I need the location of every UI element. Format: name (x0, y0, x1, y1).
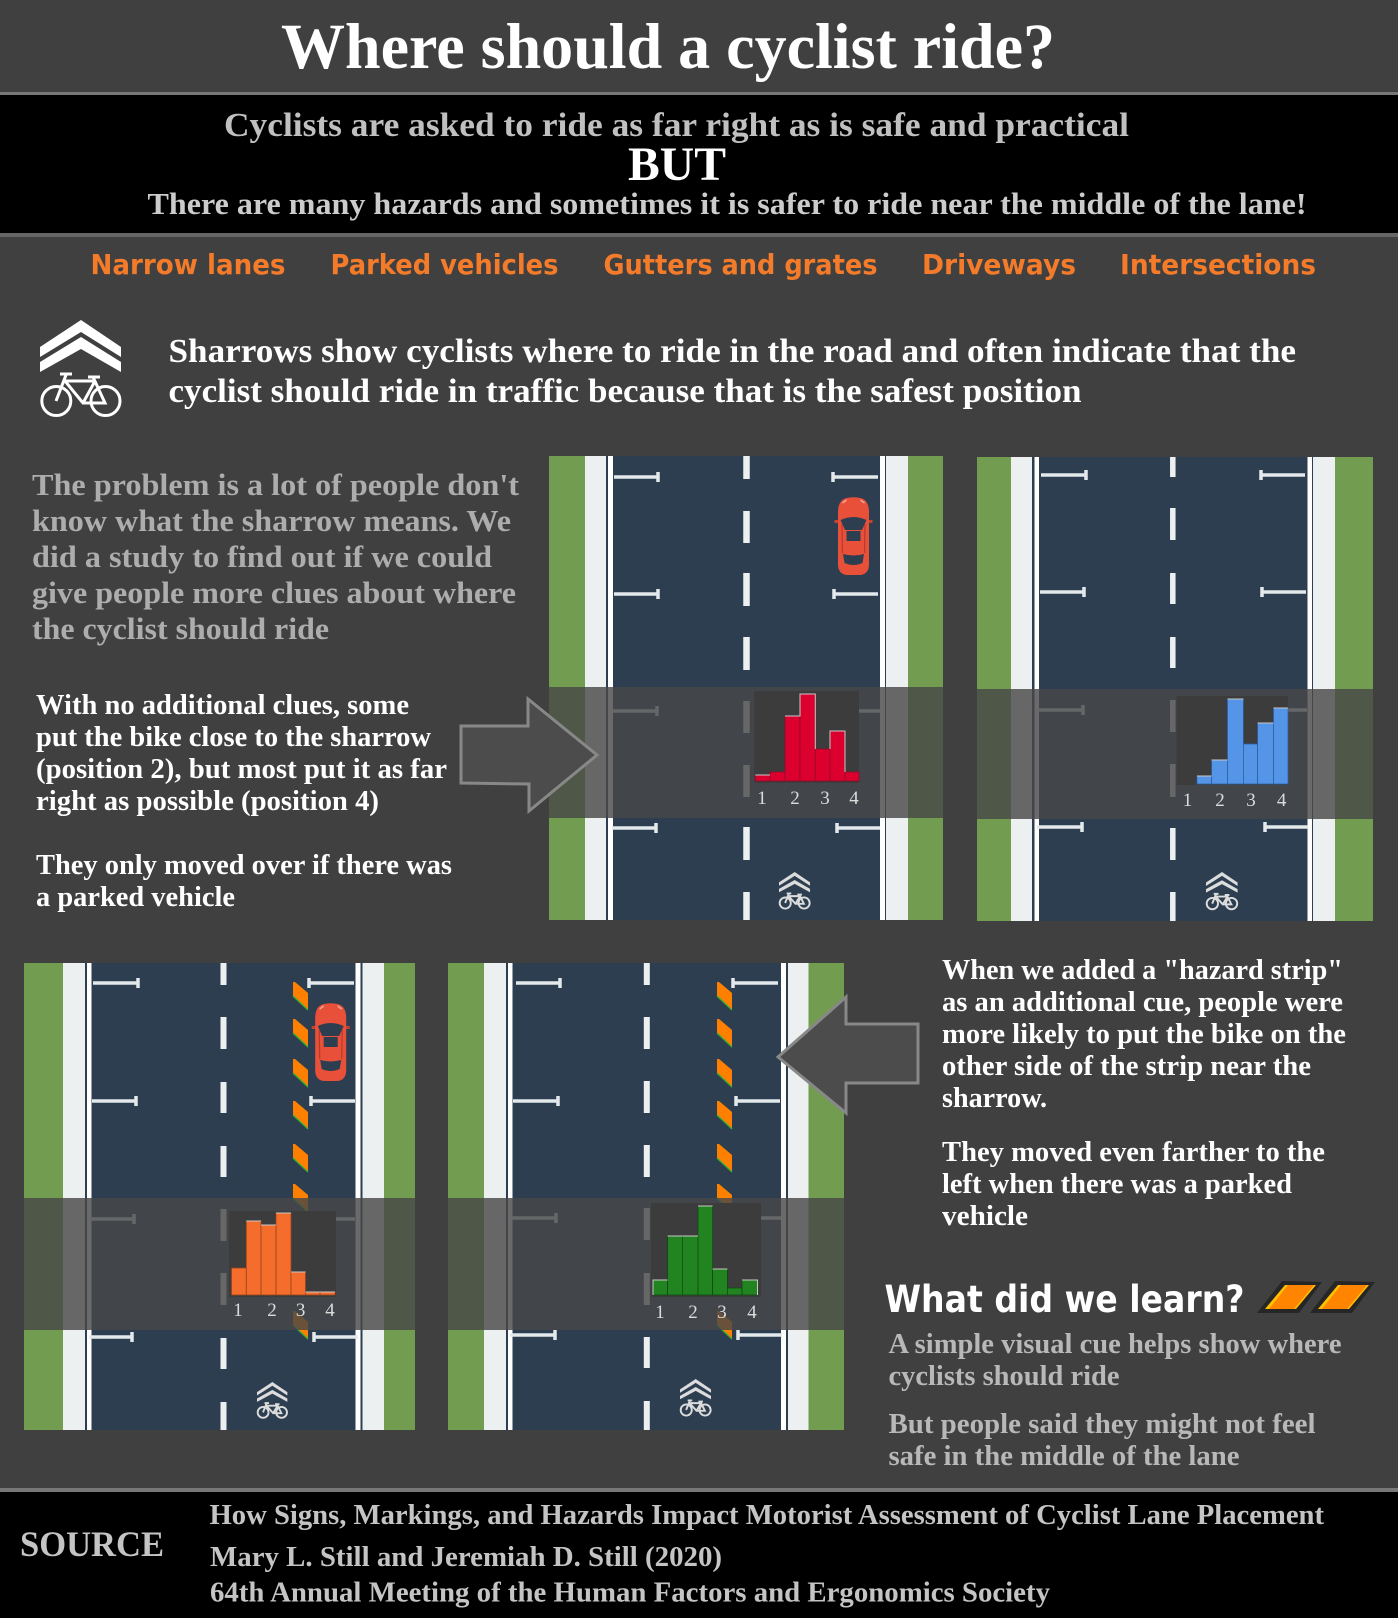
no-cue findings text (36, 690, 452, 913)
no-cue findings text: put the bike close to the sharrow (36, 722, 432, 753)
sharrow explanation (168, 333, 1296, 410)
hazard list: Parked vehicles (330, 248, 558, 281)
problem text: did a study to find out if we could (32, 539, 492, 574)
no-cue findings text: right as possible (position 4) (36, 786, 379, 817)
citation: Mary L. Still and Jeremiah D. Still (2020) (210, 1541, 722, 1573)
no-cue findings text: a parked vehicle (36, 882, 235, 913)
icon: sharrow (40, 320, 121, 416)
overlay band (448, 1198, 844, 1330)
source label: SOURCE (20, 1524, 164, 1564)
bar chart: no cue, no car: 4 (1277, 790, 1287, 811)
sharrow explanation: cyclist should ride in traffic because that is the safest position (168, 373, 1082, 410)
hazard strip (717, 982, 732, 1339)
hazard list: Gutters and grates (604, 248, 878, 281)
bar chart: no cue, parked car: 3 (820, 788, 830, 809)
bar chart: hazard strip, no car: 2 (688, 1302, 698, 1323)
hazard strip findings text: left when there was a parked (942, 1169, 1292, 1200)
overlay band (549, 687, 943, 818)
conclusions text: But people said they might not feel (888, 1408, 1316, 1440)
heading: what did we learn: What did we learn? (884, 1278, 1244, 1321)
no-cue findings text: With no additional clues, some (36, 690, 409, 721)
hazard strip findings text: They moved even farther to the (942, 1137, 1325, 1168)
overlay band (977, 689, 1373, 819)
bar chart: no cue, no car: 2 (1215, 790, 1225, 811)
problem text: the cyclist should ride (32, 611, 329, 646)
bar chart: no cue, no car: 1 (1183, 790, 1192, 811)
problem text: The problem is a lot of people don't (32, 467, 520, 502)
intro line two: There are many hazards and sometimes it is safer to ride near the middle of the lane! (148, 186, 1306, 221)
problem text: give people more clues about where (32, 575, 516, 610)
hazard strip (293, 982, 308, 1339)
icon: hazard strip swatches (1257, 1281, 1375, 1313)
icon: road sharrow (1206, 872, 1238, 909)
panel: intro banner (0, 92, 1398, 237)
bar chart: hazard strip, no car: 4 (747, 1302, 757, 1323)
hazard list: Driveways (922, 248, 1076, 281)
bar chart: hazard strip, parked car: 3 (296, 1300, 305, 1321)
icon: parked car (834, 497, 872, 575)
bar chart: hazard strip, parked car (229, 1211, 336, 1321)
but: BUT (628, 138, 726, 191)
bar chart: no cue, parked car: 4 (849, 788, 859, 809)
panel: road scene, hazard strip, no car (448, 963, 844, 1430)
bar chart: hazard strip, no car: 1 (655, 1302, 665, 1323)
bar chart: no cue, no car (1177, 696, 1288, 811)
citation: How Signs, Markings, and Hazards Impact Motorist Assessment of Cyclist Lane Placement (210, 1499, 1324, 1531)
panel: road scene, no car, no hazard strip (977, 457, 1373, 921)
hazard strip findings text: as an additional cue, people were (942, 987, 1343, 1018)
overlay band (24, 1198, 415, 1330)
title: Where should a cyclist ride? (281, 11, 1055, 83)
hazard list (90, 248, 1316, 281)
hazard strip findings text: other side of the strip near the (942, 1051, 1311, 1082)
conclusions text: safe in the middle of the lane (888, 1440, 1240, 1472)
icon: road sharrow (257, 1382, 287, 1418)
citation: 64th Annual Meeting of the Human Factors and Ergonomics Society (210, 1576, 1050, 1608)
icon: road sharrow (779, 872, 810, 909)
citation (210, 1499, 1324, 1608)
panel: road scene, hazard strip, parked car (24, 963, 415, 1430)
bar chart: hazard strip, parked car: 2 (267, 1300, 277, 1321)
arrow: left pointing (778, 997, 918, 1113)
conclusions text: cyclists should ride (888, 1360, 1120, 1392)
bar chart: hazard strip, parked car: 4 (325, 1300, 335, 1321)
no-cue findings text: (position 2), but most put it as far (36, 754, 447, 785)
hazard strip findings text: sharrow. (942, 1083, 1047, 1114)
intro line one: Cyclists are asked to ride as far right as is safe and practical (224, 107, 1129, 144)
hazard strip findings text: more likely to put the bike on the (942, 1019, 1346, 1050)
bar chart: hazard strip, no car (651, 1203, 761, 1323)
icon: road sharrow (680, 1379, 711, 1416)
bar chart: no cue, parked car: 1 (757, 788, 767, 809)
bar chart: hazard strip, no car: 3 (717, 1302, 727, 1323)
hazard list: Intersections (1120, 248, 1316, 281)
bar chart: no cue, parked car (754, 691, 859, 809)
problem text (32, 467, 520, 646)
conclusions text: A simple visual cue helps show where (888, 1328, 1342, 1360)
conclusions text (888, 1328, 1342, 1472)
hazard list: Narrow lanes (90, 248, 286, 281)
bar chart: no cue, no car: 3 (1246, 790, 1256, 811)
panel: road scene, parked car, no hazard strip (549, 456, 943, 920)
arrow: right pointing (461, 699, 597, 811)
bar chart: no cue, parked car: 2 (790, 788, 800, 809)
bar chart: hazard strip, parked car: 1 (233, 1300, 243, 1321)
hazard strip findings text (942, 955, 1346, 1232)
no-cue findings text: They only moved over if there was (36, 850, 452, 881)
icon: parked car (312, 1003, 350, 1081)
problem text: know what the sharrow means. We (32, 503, 511, 538)
panel: source (0, 1488, 1398, 1618)
hazard strip findings text: vehicle (942, 1201, 1028, 1232)
sharrow explanation: Sharrows show cyclists where to ride in the road and often indicate that the (168, 333, 1296, 370)
hazard strip findings text: When we added a "hazard strip" (942, 955, 1343, 986)
